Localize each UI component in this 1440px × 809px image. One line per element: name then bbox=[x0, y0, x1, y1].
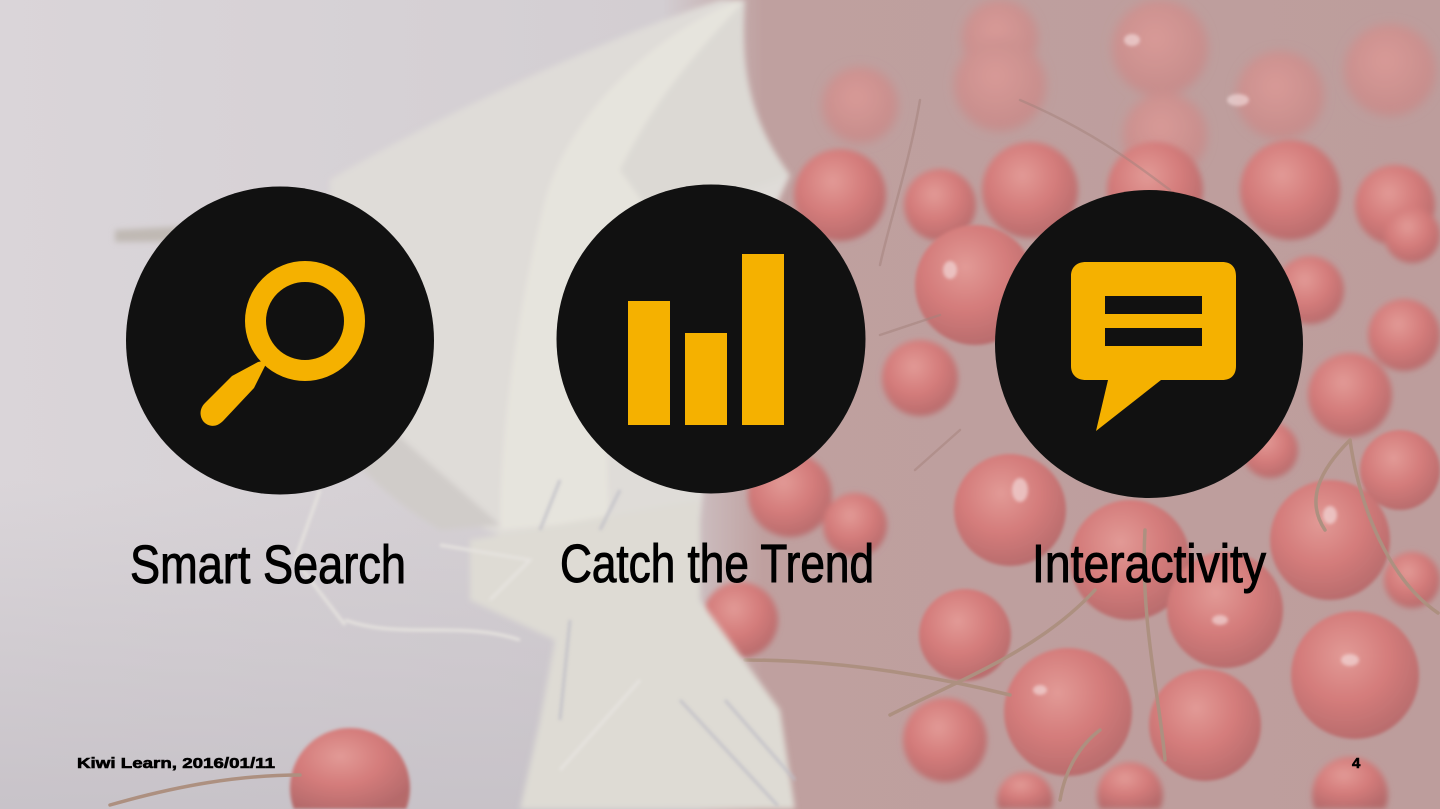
circle: interactivity bbox=[995, 190, 1303, 498]
icon: speech bubble bbox=[1071, 262, 1236, 431]
circle: catch the trend bbox=[556, 184, 866, 494]
icon: magnifying glass bbox=[201, 272, 354, 426]
cloth bag bbox=[115, 0, 795, 809]
heading: catch the trend: Catch the Trend bbox=[560, 534, 874, 594]
footer: page number: 4 bbox=[1352, 755, 1361, 772]
cherry stems bbox=[110, 440, 1438, 805]
cherries: near bbox=[702, 140, 1440, 809]
heading: smart search: Smart Search bbox=[130, 535, 406, 595]
icon: bar chart bbox=[628, 254, 784, 425]
heading: interactivity: Interactivity bbox=[1032, 534, 1266, 594]
cherries: far, out of focus bbox=[822, 0, 1436, 177]
footer: source and date: Kiwi Learn, 2016/01/11 bbox=[77, 755, 275, 772]
circle: smart search bbox=[126, 186, 434, 494]
cherry highlights bbox=[943, 34, 1359, 695]
